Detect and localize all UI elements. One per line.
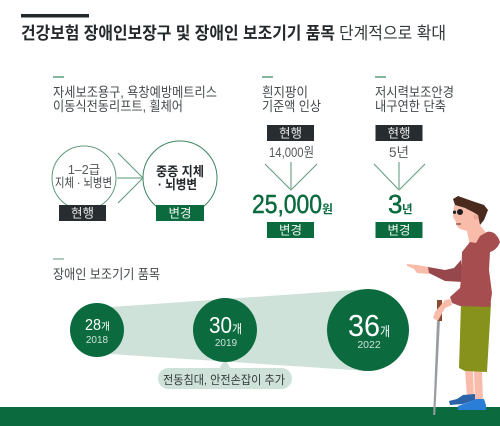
circle: 2022: 36 [348, 308, 380, 343]
durability description: 저시력보조안경 [375, 85, 454, 100]
circle: 2019: 개 [232, 322, 242, 336]
panel: white cane allowance [252, 76, 333, 238]
changed label: 변경 [279, 224, 302, 238]
changed label [267, 222, 314, 238]
allowance description [262, 85, 321, 114]
circle: current eligibility: 1–2급 [68, 163, 100, 177]
growth band [110, 289, 368, 371]
changed value: 원 [322, 202, 333, 216]
arrow: converge down [374, 162, 425, 190]
circle: current eligibility: 현행 [71, 206, 94, 220]
callout [158, 359, 292, 389]
circle: 2019: 30 [209, 312, 232, 338]
panel: glasses durability [374, 76, 454, 238]
current value: 5년 [389, 145, 409, 160]
circle: 2022: 2022 [357, 339, 381, 351]
circle: 2022 [327, 289, 409, 371]
arrow: converge down [265, 162, 317, 190]
circle: current eligibility: 지체 · 뇌병변 [55, 176, 112, 190]
current label: 현행 [387, 126, 411, 140]
title block: 건강보험 장애인보장구 및 장애인 보조기기 품목 [21, 24, 335, 43]
allowance description: 흰지팡이 [262, 85, 308, 100]
pointing hand [407, 264, 429, 274]
callout: 전동침대, 안전손잡이 추가 [163, 373, 285, 387]
cane [433, 300, 442, 415]
legs [465, 370, 483, 401]
hoodie body [450, 232, 500, 307]
eligibility description [53, 85, 217, 114]
circle: changed eligibility [143, 141, 217, 221]
circle: 2018: 2018 [86, 335, 109, 346]
circle: 2018: 개 [101, 321, 110, 333]
holding hand [433, 299, 452, 321]
circle: changed eligibility: 중증 지체 [156, 164, 204, 179]
mouth [456, 224, 461, 225]
chart heading: 장애인 보조기기 품목 [53, 267, 160, 282]
panel: eligibility [52, 76, 217, 221]
circle: changed eligibility: 변경 [168, 206, 192, 220]
changed value: 25,000 [252, 189, 322, 219]
illustration: man with cane [407, 196, 500, 415]
current label: 현행 [279, 126, 302, 140]
circle: 2019 [193, 298, 257, 362]
current label [267, 125, 314, 141]
changed label [376, 222, 422, 238]
allowance description: 기준액 인상 [262, 99, 321, 114]
circle: 2018 [70, 303, 124, 357]
title block: 단계적으로 확대 [339, 24, 446, 43]
circle: changed eligibility: · 뇌병변 [158, 177, 197, 192]
circle: 2019: 2019 [215, 338, 238, 349]
neck and face [453, 205, 487, 246]
changed label: 변경 [387, 224, 411, 238]
ground band [0, 407, 500, 426]
changed value: 년 [402, 202, 413, 216]
eligibility description: 이동식전동리프트, 휠체어 [53, 99, 183, 114]
changed value [388, 189, 413, 219]
changed value: 3 [388, 189, 402, 219]
current label [376, 125, 422, 141]
hoodie sleeve [428, 260, 463, 282]
shoes [449, 394, 486, 410]
pants [459, 303, 491, 372]
arrow: current to changed [117, 153, 143, 203]
hair [453, 196, 488, 225]
circle: current eligibility [52, 146, 116, 221]
title block [21, 14, 446, 43]
ear [474, 214, 478, 220]
circle: 2022: 개 [380, 324, 390, 339]
current value: 14,000원 [269, 145, 314, 160]
eligibility description: 자세보조용구, 욕창예방메트리스 [53, 85, 217, 100]
durability description: 내구연한 단축 [375, 99, 446, 114]
panel: assistive device items chart [53, 258, 409, 389]
circle: 2018: 28 [85, 317, 101, 334]
durability description [375, 85, 454, 114]
sunglasses [453, 209, 463, 215]
